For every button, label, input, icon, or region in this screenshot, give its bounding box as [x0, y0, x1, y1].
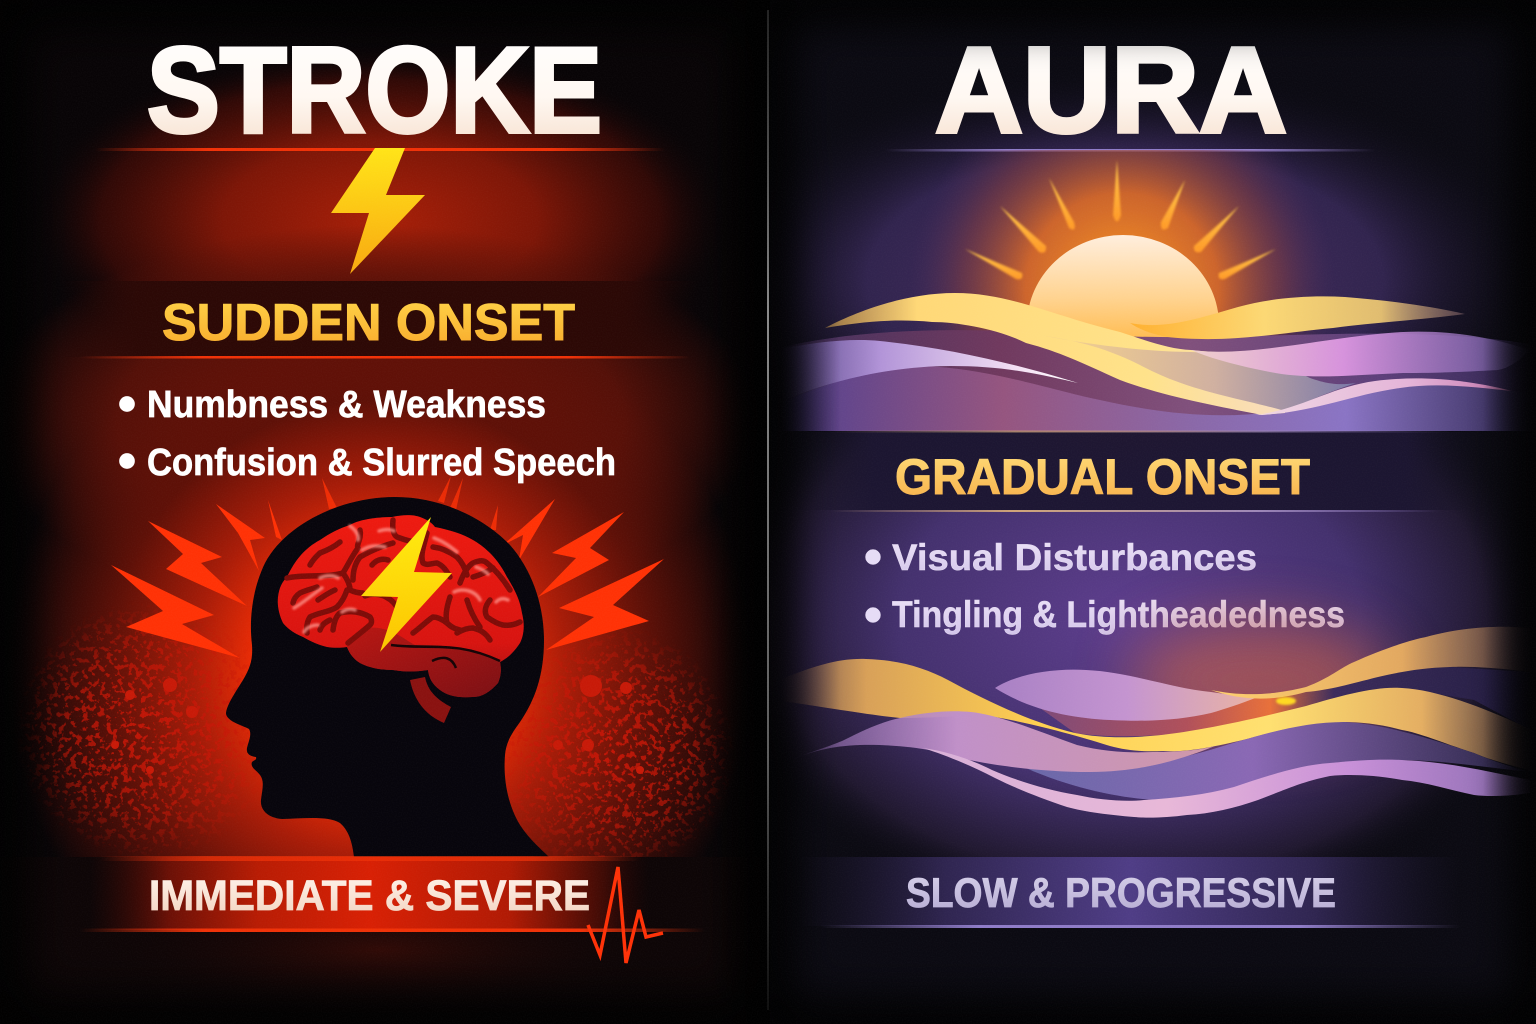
- band: sudden onset: [60, 281, 700, 357]
- icon: lightning on brain: [361, 517, 452, 652]
- banner: slow & progressive: [800, 857, 1460, 926]
- icon: yellow lightning bolt: [331, 148, 425, 274]
- warm glow behind waves: [1130, 620, 1390, 740]
- panel edge vignette: aura: [770, 0, 1536, 1024]
- tan wave: [1076, 342, 1356, 410]
- brain stem arc: [410, 677, 451, 723]
- brain fold line: [391, 645, 500, 668]
- channel between waves: [1040, 667, 1530, 736]
- sun rays: [965, 160, 1276, 279]
- title rule: stroke: [95, 148, 665, 151]
- bright spark: [1276, 697, 1296, 705]
- title: aura: AURA: [935, 22, 1287, 158]
- band rule: sudden onset: [80, 356, 690, 358]
- mauve upper lobe: [995, 670, 1258, 721]
- symptom list: stroke: Numbness & Weakness: [147, 384, 546, 426]
- title: stroke: STROKE: [147, 22, 602, 158]
- divider line: [767, 10, 769, 1010]
- splatter texture: [15, 600, 735, 875]
- panel: stroke background: [0, 0, 766, 1024]
- temporal lobe and cerebellum: [347, 628, 501, 697]
- blue wave: [1026, 722, 1530, 800]
- mauve left wave: [785, 711, 1215, 772]
- pink lower ribbon: [1255, 378, 1512, 415]
- pink wave: [1191, 332, 1530, 376]
- lilac ribbon: [923, 748, 1530, 818]
- brain: [278, 515, 524, 723]
- symptom list: aura: Tingling & Lightheadedness: [892, 594, 1345, 635]
- head silhouette: [226, 497, 549, 857]
- banner text: SLOW & PROGRESSIVE: [906, 869, 1336, 916]
- band rule: gradual onset: [830, 510, 1440, 512]
- icons: red lightning bursts: [111, 476, 664, 658]
- symptom list: aura: [866, 537, 1345, 635]
- banner rule: [80, 928, 705, 932]
- banner text: IMMEDIATE & SEVERE: [149, 872, 590, 920]
- plum wave base: [770, 330, 1536, 431]
- title rule: aura: [885, 149, 1375, 152]
- gold main wave: [775, 659, 1536, 772]
- symptom list: stroke: [120, 384, 616, 484]
- sun glow: [928, 150, 1316, 432]
- lower mauve wave: [775, 366, 1536, 431]
- heading: sudden onset: SUDDEN ONSET: [162, 294, 575, 352]
- gold right wave: [1130, 296, 1465, 339]
- icon: ekg heartbeat: [588, 867, 663, 963]
- illustration: sunrise over waves: [790, 150, 1523, 432]
- band: gradual onset: [790, 432, 1490, 510]
- gold upper right band: [1211, 627, 1530, 699]
- heading: gradual onset: GRADUAL ONSET: [895, 449, 1310, 505]
- sun disc: [1029, 235, 1218, 338]
- lilac left wave: [796, 340, 1078, 395]
- panel edge vignette: stroke: [0, 0, 766, 1024]
- brain highlights: [294, 526, 508, 632]
- banner: immediate & severe: [90, 856, 650, 930]
- symptom list: stroke: Confusion & Slurred Speech: [147, 442, 616, 484]
- symptom list: aura: Visual Disturbances: [892, 537, 1257, 578]
- panel: aura background: [770, 0, 1536, 1024]
- gold left wave: [825, 293, 1285, 415]
- band rule: top: [830, 430, 1450, 432]
- banner rule: [820, 925, 1460, 928]
- illustration: lower waves: [775, 620, 1536, 818]
- lower dark area: stroke: [0, 857, 766, 1024]
- icon: head silhouette with brain: [226, 497, 549, 857]
